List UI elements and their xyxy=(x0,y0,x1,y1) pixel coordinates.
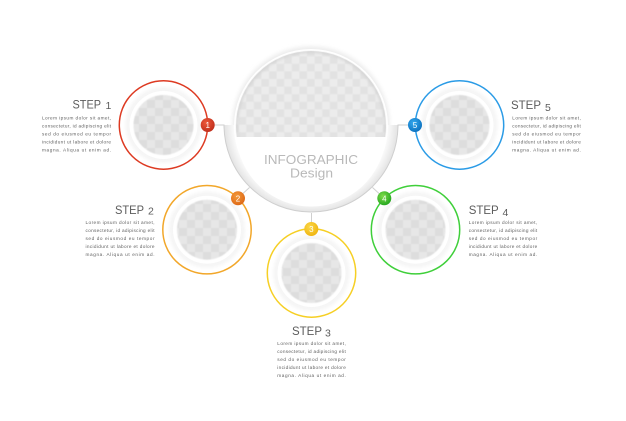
step 4 body: sed do eiusmod eu tempor xyxy=(469,236,538,241)
step 2 circle xyxy=(163,186,251,274)
step 1 body: Lorem ipsum dolor sit amet, xyxy=(42,116,111,120)
step 1 body: incididunt ut labore et dolore xyxy=(42,140,111,144)
step 5 text xyxy=(511,98,581,152)
step 2 body: consectetur, id adipiscing elit xyxy=(86,228,155,233)
badge 5: 5 xyxy=(413,121,418,130)
step 3 text xyxy=(277,324,346,378)
step 4 heading: STEP xyxy=(469,203,499,217)
step 3 body: Lorem ipsum dolor sit amet, xyxy=(277,341,346,346)
central circle xyxy=(224,46,398,212)
step 4 circle xyxy=(371,186,460,274)
step 4 text xyxy=(469,203,538,257)
step 5 circle xyxy=(415,81,504,169)
step 2 body: magna. Aliqua ut enim ad. xyxy=(86,252,154,257)
step 3 body: magna. Aliqua ut enim ad. xyxy=(277,373,346,378)
step 3 heading: 3 xyxy=(325,328,331,340)
connector lines xyxy=(208,125,415,229)
central soft shadow xyxy=(232,46,390,204)
badge 1: 1 xyxy=(205,121,210,130)
step 2 body xyxy=(86,220,155,257)
step 3 heading: STEP xyxy=(292,324,322,338)
step 2 text xyxy=(86,203,155,257)
step 5 heading: STEP xyxy=(511,98,541,112)
step 1 body: consectetur, id adipiscing elit xyxy=(42,124,112,128)
step 2 heading: STEP xyxy=(115,203,144,217)
step 2 body: sed do eiusmod eu tempor xyxy=(86,236,155,241)
step 3 circle xyxy=(267,229,356,317)
badge 2 xyxy=(231,191,245,205)
step 4 body: consectetur, id adipiscing elit xyxy=(469,228,538,233)
step 5 body: consectetur, id adipiscing elit xyxy=(512,124,581,128)
step 5 body: incididunt ut labore et dolore xyxy=(512,140,581,144)
step 3 body: consectetur, id adipiscing elit xyxy=(277,349,346,354)
step 5 body xyxy=(512,116,581,152)
step 5 heading: 5 xyxy=(545,102,551,114)
central white disc xyxy=(234,49,388,203)
badge 3 xyxy=(304,222,318,236)
badge 4: 4 xyxy=(382,194,387,203)
step 4 body: incididunt ut labore et dolore xyxy=(469,244,538,249)
step 2 heading: 2 xyxy=(148,206,154,218)
step 3 body xyxy=(277,341,346,378)
badge 5 xyxy=(408,118,422,132)
step 5 body: Lorem ipsum dolor sit amet, xyxy=(512,116,581,120)
step 1 circle xyxy=(119,81,208,169)
badge 3: 3 xyxy=(309,225,314,234)
step 1 text xyxy=(42,98,112,152)
step 1 body xyxy=(42,116,112,152)
step 5 heading xyxy=(511,98,551,114)
step 4 body: Lorem ipsum dolor sit amet, xyxy=(469,220,537,225)
step 1 heading: STEP xyxy=(72,98,101,112)
central photo placeholder xyxy=(236,50,386,137)
central subtitle: Design xyxy=(290,166,333,180)
step 2 body: incididunt ut labore et dolore xyxy=(86,244,155,249)
step 3 body: incididunt ut labore et dolore xyxy=(277,365,346,370)
step 1 body: sed do eiusmod eu tempor xyxy=(42,132,111,136)
step 4 body: magna. Aliqua ut enim ad. xyxy=(469,252,537,257)
central lower white section xyxy=(236,137,386,207)
central bevel xyxy=(224,125,398,212)
step 5 body: sed do eiusmod eu tempor xyxy=(512,132,581,136)
step 4 body xyxy=(469,220,538,257)
step 4 heading xyxy=(469,203,508,219)
badge 1 xyxy=(201,118,215,132)
step 4 heading: 4 xyxy=(502,207,508,219)
step 1 body: magna. Aliqua ut enim ad. xyxy=(42,148,111,152)
badge 4 xyxy=(377,191,391,205)
badge 2: 2 xyxy=(236,194,241,203)
step 3 body: sed do eiusmod eu tempor xyxy=(277,357,346,362)
step 2 body: Lorem ipsum dolor sit amet, xyxy=(86,220,154,225)
central title: INFOGRAPHIC xyxy=(264,152,358,167)
step 5 body: magna. Aliqua ut enim ad. xyxy=(512,148,581,152)
step 1 heading: 1 xyxy=(106,100,112,112)
